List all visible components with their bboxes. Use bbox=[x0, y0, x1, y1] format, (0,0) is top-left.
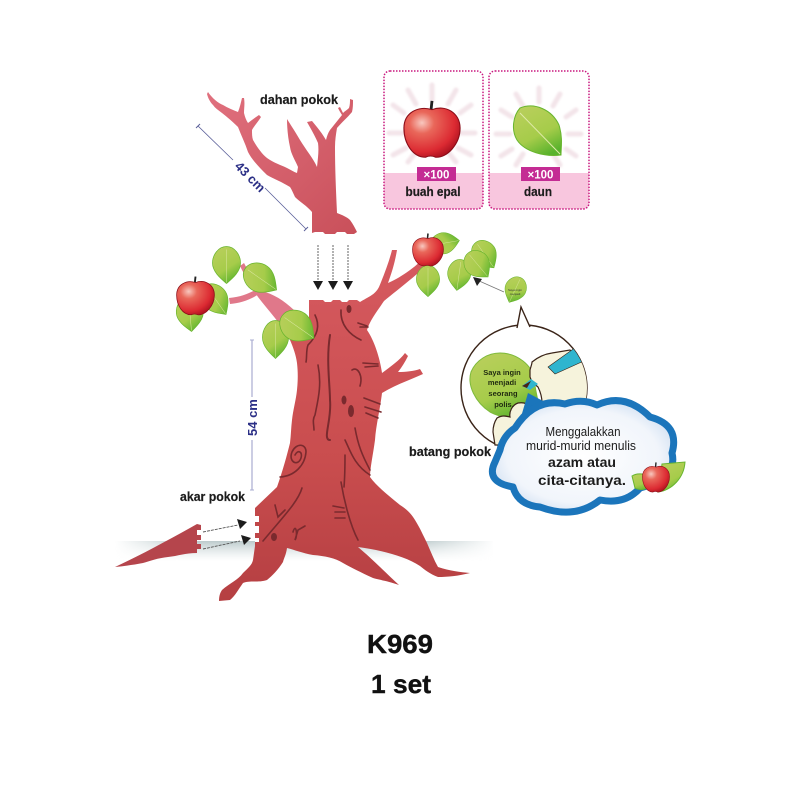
arrows: root into trunk bbox=[203, 519, 251, 549]
left notch gap on trunk bbox=[255, 516, 259, 542]
leaf text: seorang bbox=[488, 389, 518, 398]
cloud callout bbox=[492, 393, 685, 512]
leaf text: Saya ingin bbox=[483, 368, 521, 377]
hand with pen bbox=[529, 349, 587, 401]
trunk bbox=[219, 250, 470, 601]
leaf text: polis. bbox=[494, 400, 514, 409]
cloud callout: murid-murid menulis bbox=[526, 439, 636, 453]
arrows: branch into trunk bbox=[313, 245, 353, 290]
ground shadow bbox=[124, 541, 486, 557]
small written leaf with arrow bbox=[473, 273, 530, 307]
root piece bbox=[115, 524, 201, 567]
cloud callout: azam atau bbox=[548, 454, 616, 470]
dimension: 43 cm: 43 cm bbox=[232, 159, 269, 195]
card: daun: daun bbox=[524, 185, 552, 199]
rays bbox=[389, 85, 475, 162]
dimension: 43 cm bbox=[196, 124, 308, 231]
left pink branch bbox=[229, 263, 309, 340]
leaves and apple right cluster bbox=[413, 230, 504, 297]
label: dahan pokok: dahan pokok bbox=[260, 93, 338, 107]
branch piece: dahan pokok bbox=[207, 92, 357, 234]
speech circle with writing hand bbox=[461, 307, 592, 451]
leaves and apple left cluster bbox=[175, 246, 323, 358]
cloud callout: cita-citanya. bbox=[538, 472, 626, 488]
product code: K969 bbox=[367, 629, 433, 659]
cloud callout: Menggalakkan bbox=[546, 425, 621, 439]
leaf text: menjadi bbox=[488, 378, 516, 387]
card: daun bbox=[489, 71, 589, 209]
quantity: 1 set bbox=[371, 669, 431, 699]
apple and leaves on cloud bbox=[632, 462, 685, 492]
small written leaf with arrow: Saya ingin bbox=[508, 288, 522, 292]
dimension: 54 cm: 54 cm bbox=[245, 399, 260, 436]
label: akar pokok: akar pokok bbox=[180, 490, 245, 504]
small written leaf with arrow: menjadi bbox=[510, 292, 521, 296]
card: daun: ×100 bbox=[528, 170, 553, 182]
dimension: 54 cm bbox=[245, 340, 260, 490]
card: buah epal bbox=[384, 71, 483, 209]
bark knots bbox=[271, 305, 354, 541]
bark lines bbox=[263, 310, 381, 541]
leaf text bbox=[483, 368, 521, 409]
card: buah epal: ×100 bbox=[424, 170, 449, 182]
green leaf bbox=[470, 353, 540, 418]
rays bbox=[496, 88, 581, 165]
label: batang pokok: batang pokok bbox=[409, 445, 491, 459]
card: buah epal: buah epal bbox=[406, 185, 460, 199]
